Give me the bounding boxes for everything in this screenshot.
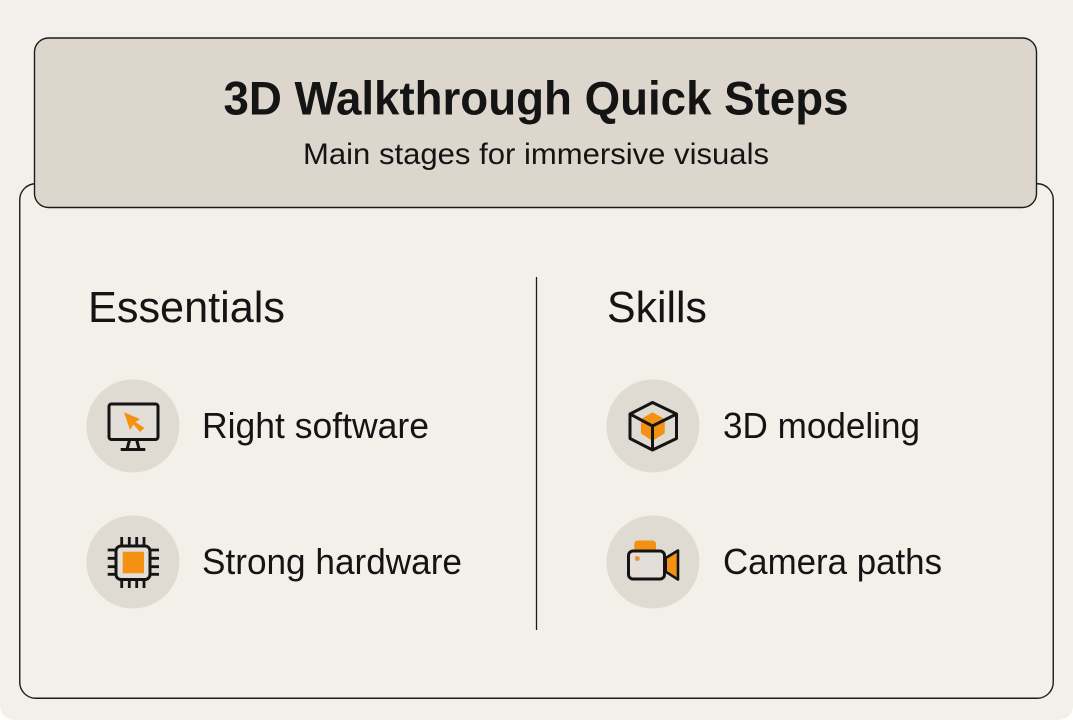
divider [536,277,538,630]
item: 3d modeling [606,380,920,472]
heading: essentials: Essentials [88,283,285,332]
label: camera paths: Camera paths [723,541,942,582]
panel: skills column [606,283,942,608]
icon: 3d cube [606,380,700,472]
item: strong hardware [86,516,462,608]
label: 3d modeling: 3D modeling [723,405,920,446]
panel: header banner [34,38,1036,208]
heading: skills: Skills [607,283,707,332]
label: right software: Right software [202,405,429,446]
item: camera paths [606,516,942,608]
title: 3D Walkthrough Quick Steps [224,72,848,126]
icon: video camera [606,516,700,608]
panel: essentials column [86,283,462,608]
item: right software [86,380,429,472]
icon: cpu chip [86,516,180,608]
panel: main content card [20,184,1053,698]
subtitle: Main stages for immersive visuals [303,138,769,171]
label: strong hardware: Strong hardware [202,541,462,582]
icon: monitor with cursor [86,380,180,472]
